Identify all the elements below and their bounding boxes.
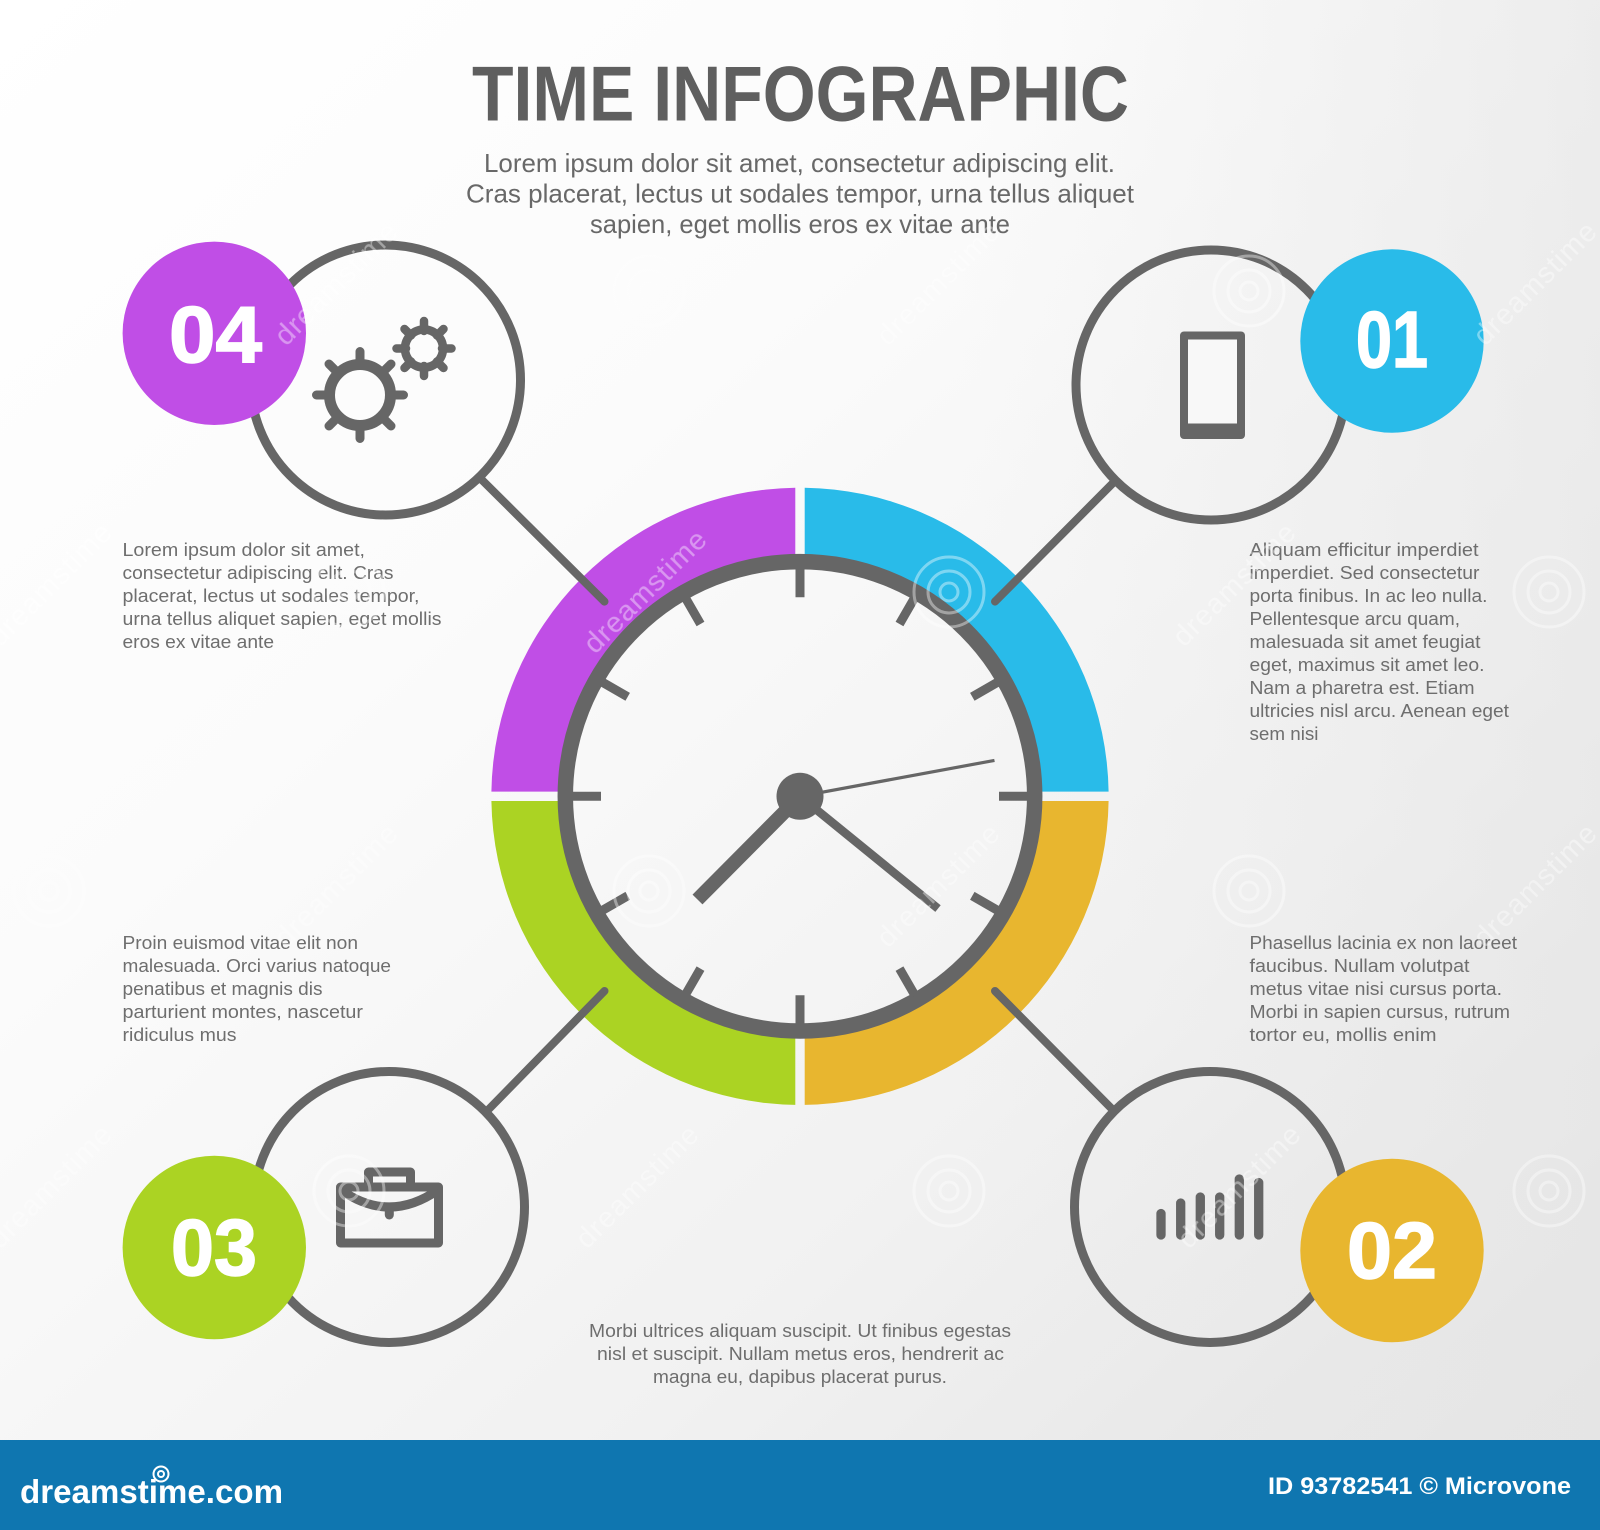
subtitle: sapien, eget mollis eros ex vitae ante — [590, 209, 1010, 239]
segment: yellow — [805, 801, 1109, 1105]
text block: step 03: parturient montes, nascetur — [122, 1001, 363, 1022]
icon: phone — [1180, 332, 1245, 439]
hour ticks — [570, 566, 1030, 1026]
icon: gears — [316, 321, 452, 438]
segment: green — [491, 801, 795, 1105]
text block: step 02: tortor eu, mollis enim — [1250, 1024, 1436, 1045]
icon: briefcase — [340, 1172, 438, 1243]
text block: step 04 — [122, 539, 442, 652]
text block: step 01: sem nisi — [1250, 723, 1318, 744]
watermark text: dreamstime — [268, 817, 405, 954]
watermark text: dreamstime — [268, 215, 405, 352]
text block: step 01: Aliquam efficitur imperdiet — [1250, 539, 1478, 560]
text block: step 01: imperdiet. Sed consectetur — [1250, 562, 1480, 583]
clock ring segments — [491, 488, 1109, 1105]
panel: step 03 — [123, 1072, 524, 1342]
number badge 03 — [123, 1156, 306, 1339]
text block: step 03: malesuada. Orci varius natoque — [122, 955, 391, 976]
hub — [776, 773, 824, 820]
number 02: 02 — [1347, 1206, 1437, 1295]
icon: logo spiral — [154, 1466, 168, 1482]
minute hand — [800, 796, 938, 909]
number badge 02 — [1300, 1159, 1484, 1342]
circle outline — [254, 1072, 524, 1342]
segment: purple — [491, 488, 795, 792]
text block: step 02: Phasellus lacinia ex non laoreet — [1250, 932, 1517, 953]
watermark text: dreamstime — [577, 523, 714, 660]
number 04: 04 — [169, 290, 263, 379]
circle outline — [1074, 1072, 1346, 1342]
hour hand — [698, 796, 800, 900]
text block: bottom center: magna eu, dapibus placerat purus. — [653, 1366, 947, 1387]
footer bar — [0, 1440, 1600, 1530]
number badge 04 — [123, 242, 306, 425]
text block: step 02: metus vitae nisi cursus porta. — [1250, 978, 1502, 999]
watermark text: dreamstime — [1171, 1118, 1308, 1255]
text block: step 04: eros ex vitae ante — [122, 631, 274, 652]
text block: step 01: eget, maximus sit amet leo. — [1250, 654, 1484, 675]
text block: step 03: penatibus et magnis dis — [122, 978, 322, 999]
footer logo: dreamstime.com — [20, 1473, 283, 1510]
text block: step 03: Proin euismod vitae elit non — [122, 932, 358, 953]
number badge 01 — [1300, 249, 1484, 433]
second hand — [800, 760, 994, 796]
subtitle — [466, 148, 1135, 239]
text block: step 04: placerat, lectus ut sodales tempor, — [122, 585, 420, 606]
circle outline — [1076, 250, 1346, 520]
panel: step 04 — [123, 242, 520, 515]
watermark spirals — [14, 256, 1584, 1226]
text block: step 02 — [1250, 932, 1517, 1045]
text block: step 02: Morbi in sapien cursus, rutrum — [1250, 1001, 1510, 1022]
text block: step 03 — [122, 932, 391, 1045]
watermark text: dreamstime — [870, 215, 1007, 352]
text block: step 01: Nam a pharetra est. Etiam — [1250, 677, 1474, 698]
text block: step 01: ultricies nisl arcu. Aenean eget — [1250, 700, 1509, 721]
text block: bottom center: nisl et suscipit. Nullam metus eros, hendrerit ac — [597, 1343, 1004, 1364]
icon: bar signal — [1161, 1179, 1259, 1235]
subtitle: Lorem ipsum dolor sit amet, consectetur adipiscing elit. — [484, 148, 1115, 178]
text block: step 02: faucibus. Nullam volutpat — [1250, 955, 1470, 976]
number 01: 01 — [1356, 295, 1428, 384]
connector lines — [482, 480, 1113, 1110]
text block: step 01: Pellentesque arcu quam, — [1250, 608, 1460, 629]
title: TIME INFOGRAPHIC — [472, 50, 1129, 138]
subtitle: Cras placerat, lectus ut sodales tempor, urna tellus aliquet — [466, 178, 1135, 208]
text block: step 01 — [1250, 539, 1509, 744]
watermark text: dreamstime — [569, 1118, 706, 1255]
number 03: 03 — [171, 1203, 257, 1292]
text block: bottom center: Morbi ultrices aliquam suscipit. Ut finibus egestas — [589, 1320, 1011, 1341]
panel: step 01 — [1076, 249, 1484, 520]
segment: blue — [805, 488, 1109, 792]
panel: step 02 — [1074, 1072, 1484, 1342]
text block: bottom center — [589, 1320, 1011, 1387]
watermark text: dreamstime — [1166, 516, 1303, 653]
text block: step 04: consectetur adipiscing elit. Cras — [122, 562, 394, 583]
clock rim — [565, 562, 1035, 1031]
clock face — [565, 562, 1035, 1031]
footer credit: ID 93782541 © Microvone — [1268, 1473, 1571, 1500]
text block: step 01: malesuada sit amet feugiat — [1250, 631, 1480, 652]
text block: step 04: urna tellus aliquet sapien, eget mollis — [122, 608, 442, 629]
watermark text — [0, 215, 1600, 1255]
circle outline — [250, 245, 520, 515]
text block: step 04: Lorem ipsum dolor sit amet, — [122, 539, 365, 560]
text block: step 03: ridiculus mus — [122, 1024, 236, 1045]
text block: step 01: porta finibus. In ac leo nulla. — [1250, 585, 1488, 606]
watermark text: dreamstime — [870, 817, 1007, 954]
